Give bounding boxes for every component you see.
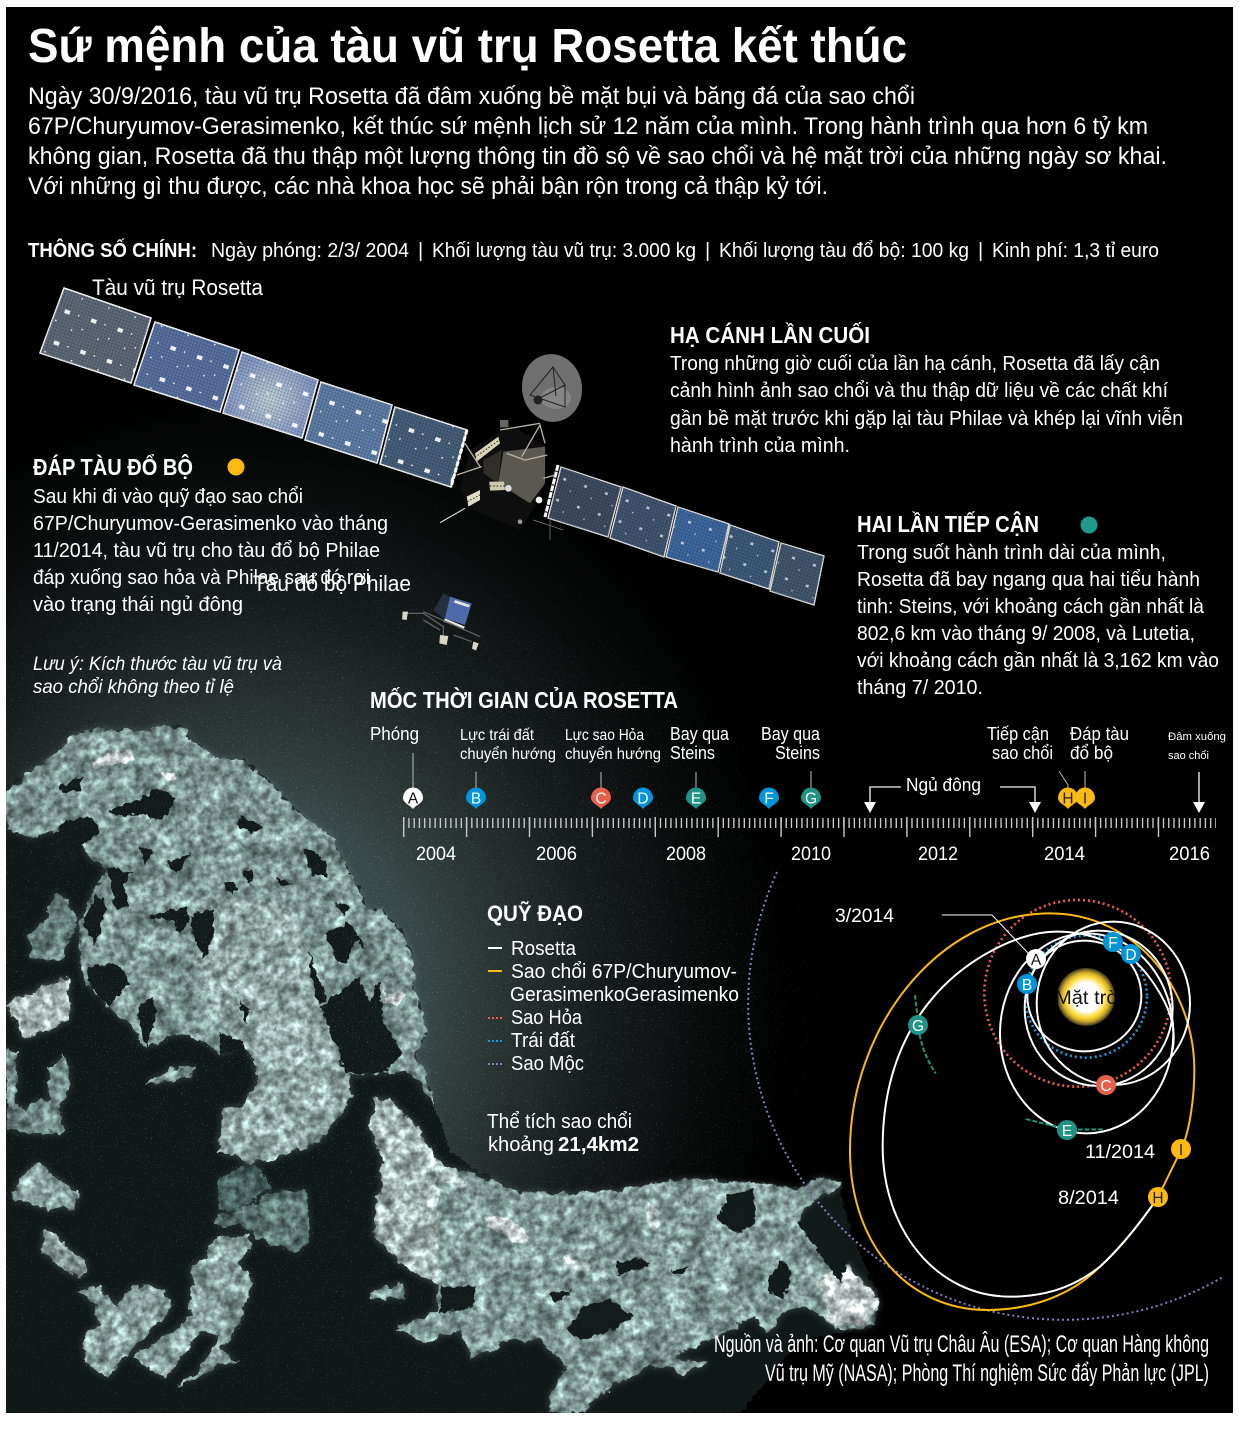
timeline event labels: Tiếp cận (987, 724, 1049, 744)
intro paragraph: Với những gì thu được, các nhà khoa học sẽ phải bận rộn trong cả thập kỷ tới. (28, 173, 828, 200)
Earth orbit (1025, 936, 1147, 1058)
timeline leader lines (413, 753, 1085, 789)
timeline years: 2016 (1169, 843, 1210, 865)
key specifications row (28, 238, 1159, 262)
timeline event labels: Bay qua (670, 724, 730, 744)
key specifications row: | (418, 240, 423, 262)
orbit date labels: 11/2014 (1085, 1141, 1155, 1163)
timeline event labels: đổ bộ (1070, 743, 1113, 763)
text block: lander deployment: 11/2014, tàu vũ trụ cho tàu đổ bộ Philae (33, 539, 380, 562)
text block: lander deployment (33, 453, 388, 616)
intro paragraph (28, 83, 1167, 200)
leader line: March 2014 (942, 915, 1028, 953)
intro paragraph: Ngày 30/9/2016, tàu vũ trụ Rosetta đã đâm xuống bề mặt bụi và băng đá của sao chổi (28, 83, 915, 110)
timeline markers A to I: H (1062, 790, 1074, 808)
text block: lander deployment: 67P/Churyumov-Gerasimenko vào tháng (33, 512, 388, 535)
timeline markers A to I: A (408, 790, 419, 808)
note: scale disclaimer (33, 654, 282, 698)
note: scale disclaimer: Lưu ý: Kích thước tàu vũ trụ và (33, 654, 282, 675)
timeline event labels: sao chổi (1168, 750, 1209, 762)
right lobe lit surface (438, 1167, 880, 1413)
high-gain dish antenna (522, 354, 582, 422)
source credit (714, 1331, 1209, 1387)
text block: two flybys: Rosetta đã bay ngang qua hai tiểu hành (857, 568, 1200, 591)
timeline event labels (370, 724, 1226, 795)
timeline ruler (403, 823, 1216, 827)
image: comet 67P (0, 725, 880, 1420)
timeline event labels: Bay qua (761, 724, 821, 744)
timeline years: 2012 (918, 843, 958, 865)
comet volume note (487, 1111, 639, 1156)
Sun (1055, 968, 1124, 1026)
text block: two flybys: với khoảng cách gần nhất là 3,162 km vào (857, 649, 1219, 672)
timeline years: 2010 (791, 843, 831, 865)
timeline markers A to I: I (1083, 790, 1087, 808)
key specifications row: Khối lượng tàu đổ bộ: 100 kg (719, 240, 969, 262)
key specifications row: | (705, 240, 710, 262)
timeline years: 2008 (666, 843, 706, 865)
comet dark silhouette (0, 725, 880, 1420)
timeline event labels: sao chổi (992, 743, 1053, 763)
Jupiter orbit (748, 872, 1223, 1320)
timeline years: 2014 (1044, 843, 1085, 865)
key specifications row: | (978, 240, 983, 262)
orbit markers: D (1125, 947, 1137, 964)
comet orbit (850, 913, 1194, 1310)
orbit markers: H (1152, 1190, 1164, 1207)
timeline markers A to I: F (764, 790, 774, 808)
note: scale disclaimer: sao chổi không theo tỉ lệ (33, 677, 234, 698)
intro paragraph: không gian, Rosetta đã thu thập một lượng thông tin đồ sộ về sao chổi và hệ mặt trời của những ngày sơ khai. (28, 143, 1167, 170)
comet volume note: khoảng (488, 1134, 554, 1156)
timeline markers A to I: D (637, 790, 649, 808)
timeline markers A to I: C (595, 790, 607, 808)
text block: lander deployment: đáp xuống sao hỏa và Philae sau đó rơi (33, 566, 370, 589)
timeline event labels: Steins (670, 743, 715, 763)
orbit markers: E (1062, 1123, 1072, 1140)
timeline markers A to I: B (471, 790, 481, 808)
key specifications row: Khối lượng tàu vũ trụ: 3.000 kg (432, 240, 696, 262)
timeline markers A to I: G (805, 790, 817, 808)
timeline (370, 685, 1226, 865)
orbit diagram (748, 872, 1223, 1320)
orbit markers: G (912, 1018, 924, 1035)
orbit markers: F (1108, 935, 1118, 952)
orbit date labels (835, 905, 1155, 1209)
comet sunlit surface (6, 725, 880, 1413)
timeline heading: MỐC THỜI GIAN CỦA ROSETTA (370, 685, 678, 713)
timeline event labels: chuyển hướng (565, 745, 661, 763)
key specifications row: Kinh phí: 1,3 tỉ euro (992, 240, 1159, 262)
orbit legend: GerasimenkoGerasimenko (510, 984, 739, 1006)
timeline event labels: Lực trái đất (460, 727, 535, 744)
orbit markers: B (1022, 977, 1032, 994)
orbit date labels: 8/2014 (1058, 1187, 1119, 1209)
text block: final descent: HẠ CÁNH LẦN CUỐI (670, 321, 870, 348)
comet volume note: Thể tích sao chổi (487, 1111, 632, 1133)
timeline years: 2006 (536, 843, 577, 865)
hibernation arrows (864, 772, 1205, 813)
text block: final descent (670, 321, 1183, 457)
orbit legend: Rosetta (511, 938, 577, 960)
key specifications row: Ngày phóng: 2/3/ 2004 (211, 240, 409, 262)
orbit legend: Sao Hỏa (511, 1007, 583, 1029)
text block: two flybys: 802,6 km vào tháng 9/ 2008, và Lutetia, (857, 622, 1195, 645)
text block: two flybys: Trong suốt hành trình dài của mình, (857, 541, 1166, 564)
timeline event labels: Đâm xuống (1168, 731, 1226, 743)
right solar wing (548, 467, 824, 605)
orbit legend: Trái đất (511, 1030, 575, 1052)
spacecraft: Philae lander (402, 593, 480, 651)
orbit markers: A (1031, 952, 1042, 969)
text block: lander deployment: vào trạng thái ngủ đông (33, 593, 243, 616)
timeline event labels: Phóng (370, 724, 419, 744)
comet shadows (46, 777, 850, 1340)
text block: two flybys: tháng 7/ 2010. (857, 676, 983, 699)
comet volume note: 21,4km2 (558, 1134, 639, 1156)
timeline years: 2004 (416, 843, 456, 865)
orbit markers: I (1179, 1142, 1183, 1159)
text block: two flybys: HAI LẦN TIẾP CẬN (857, 510, 1039, 537)
orbit markers: C (1100, 1078, 1112, 1095)
left solar wing (40, 288, 467, 487)
text block: final descent: Trong những giờ cuối của lần hạ cánh, Rosetta đã lấy cận (670, 352, 1160, 375)
text block: two flybys: tinh: Steins, với khoảng cách gần nhất là (857, 595, 1205, 618)
timeline markers A to I (403, 788, 1095, 809)
asteroid path markers (915, 995, 1103, 1130)
text block: final descent: cảnh hình ảnh sao chổi và thu thập dữ liệu về các chất khí (670, 379, 1168, 402)
text block: lander deployment: ĐÁP TÀU ĐỔ BỘ (33, 453, 193, 480)
Rosetta orbits (883, 922, 1190, 1297)
timeline years (416, 843, 1210, 865)
timeline event labels: Đáp tàu (1070, 724, 1129, 744)
text block: lander deployment: Sau khi đi vào quỹ đạo sao chổi (33, 485, 303, 508)
upper lobe lit surface (6, 725, 426, 1073)
orbit legend (487, 901, 739, 1075)
orbit date labels: 3/2014 (835, 905, 894, 927)
text block: final descent: gần bề mặt trước khi gặp lại tàu Philae và khép lại vĩnh viễn (670, 407, 1183, 430)
orbit legend: Sao Mộc (511, 1053, 584, 1075)
key specifications row: THÔNG SỐ CHÍNH: (28, 238, 197, 262)
orbit legend: QUỸ ĐẠO (487, 901, 583, 926)
text block: final descent: hành trình của mình. (670, 434, 850, 457)
spacecraft body (440, 420, 563, 540)
timeline event labels: Steins (775, 743, 820, 763)
spacecraft: Rosetta (40, 288, 824, 605)
timeline markers A to I: E (691, 790, 701, 808)
orbit markers (908, 932, 1191, 1207)
timeline event labels: Ngủ đông (906, 775, 981, 795)
Sun: Mặt trời (1055, 988, 1124, 1009)
lower lobe lit patches (6, 1062, 456, 1388)
text block: two flybys (857, 510, 1219, 699)
timeline event labels: chuyển hướng (460, 745, 556, 763)
orbit legend: Sao chổi 67P/Churyumov- (511, 961, 737, 983)
title: Sứ mệnh của tàu vũ trụ Rosetta kết thúc (28, 20, 907, 73)
Mars orbit (984, 900, 1171, 1087)
timeline event labels: Lực sao Hỏa (565, 727, 644, 744)
intro paragraph: 67P/Churyumov-Gerasimenko, kết thúc sứ mệnh lịch sử 12 năm của mình. Trong hành trình qua hơn 6 tỷ km (28, 113, 1148, 140)
label: Philae lander: Tàu đổ bộ Philae (253, 571, 411, 596)
label: Rosetta spacecraft: Tàu vũ trụ Rosetta (92, 275, 264, 300)
